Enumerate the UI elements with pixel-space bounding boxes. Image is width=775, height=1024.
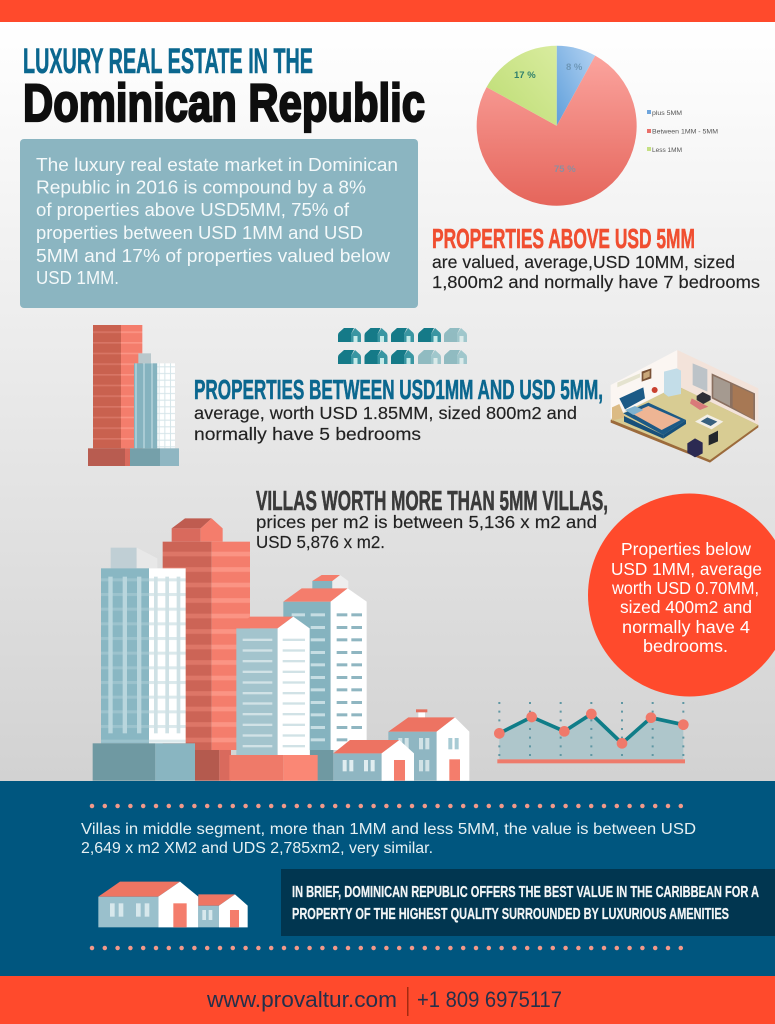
pie legend	[647, 110, 718, 154]
callout: properties below 1MM: worth USD 0.70MM,	[611, 578, 759, 598]
building: front tower	[229, 617, 318, 781]
panel: market summary: The luxury real estate market in Dominican	[36, 155, 398, 175]
contact bar: www.provaltur.com	[206, 987, 397, 1012]
title: Dominican Republic	[23, 74, 425, 133]
panel: market summary: 5MM and 17% of properties valued below	[36, 246, 391, 266]
top bar	[0, 0, 775, 22]
pie legend: Between 1MM - 5MM	[652, 128, 718, 136]
contact bar	[0, 976, 775, 1024]
panel: market summary: Republic in 2016 is compound by a 8%	[36, 178, 366, 198]
icon: house count grid	[338, 328, 467, 364]
pie chart: 8 %	[566, 62, 583, 73]
contact bar: +1 809 6975117	[417, 987, 562, 1012]
callout: properties below 1MM: sized 400m2 and	[620, 597, 752, 617]
callout: properties below 1MM: USD 1MM, average	[611, 559, 762, 579]
pie chart: 75 %	[554, 164, 576, 175]
text: middle segment villas: Villas in middle segment, more than 1MM and less 5MM, the value is between USD	[81, 821, 696, 838]
illustration: city skyline	[93, 518, 469, 781]
pie chart: 17 %	[514, 70, 536, 81]
pie legend: plus 5MM	[652, 110, 682, 117]
line chart	[494, 702, 689, 763]
callout: properties below 1MM: bedrooms.	[643, 636, 728, 656]
text: villas price per m2: USD 5,876 x m2.	[256, 532, 385, 552]
panel: market summary: USD 1MM.	[36, 268, 119, 288]
text: above 5MM details: are valued, average,USD 10MM, sized	[432, 252, 735, 272]
text: middle segment villas: 2,649 x m2 XM2 and UDS 2,785xm2, very similar.	[81, 840, 433, 857]
text: above 5MM details: 1,800m2 and normally have 7 bedrooms	[432, 272, 760, 292]
text: villas price per m2	[256, 512, 597, 552]
building: small house	[333, 740, 414, 781]
panel: market summary	[20, 139, 418, 308]
pie legend: Less 1MM	[652, 147, 682, 154]
title: LUXURY REAL ESTATE IN THE	[23, 42, 313, 81]
title	[23, 42, 425, 133]
background	[0, 22, 775, 781]
text: middle segment villas	[81, 821, 696, 857]
callout: in brief	[281, 869, 775, 936]
panel: market summary: properties between USD 1MM and USD	[36, 223, 363, 243]
panel: blue footer band	[0, 781, 775, 976]
building: blue glass tower	[93, 548, 195, 781]
icon: isometric bedroom	[611, 350, 758, 463]
building: red tower	[163, 518, 250, 781]
building: mid-rise	[283, 575, 367, 781]
text: between 1MM and 5MM details: average, worth USD 1.85MM, sized 800m2 and	[194, 403, 577, 423]
icon: office towers	[88, 325, 179, 466]
pie chart	[477, 46, 637, 206]
building: large house	[388, 709, 469, 781]
text: between 1MM and 5MM details	[194, 403, 577, 444]
text: above 5MM details	[432, 252, 760, 292]
callout: properties below 1MM: Properties below	[621, 539, 751, 559]
text: villas price per m2: prices per m2 is between 5,136 x m2 and	[256, 512, 597, 532]
text: between 1MM and 5MM details: normally have 5 bedrooms	[194, 424, 421, 444]
panel: market summary: of properties above USD5MM, 75% of	[36, 200, 350, 220]
icon: two houses	[98, 882, 248, 927]
callout: properties below 1MM	[588, 494, 775, 696]
callout: properties below 1MM: normally have 4	[622, 617, 750, 637]
